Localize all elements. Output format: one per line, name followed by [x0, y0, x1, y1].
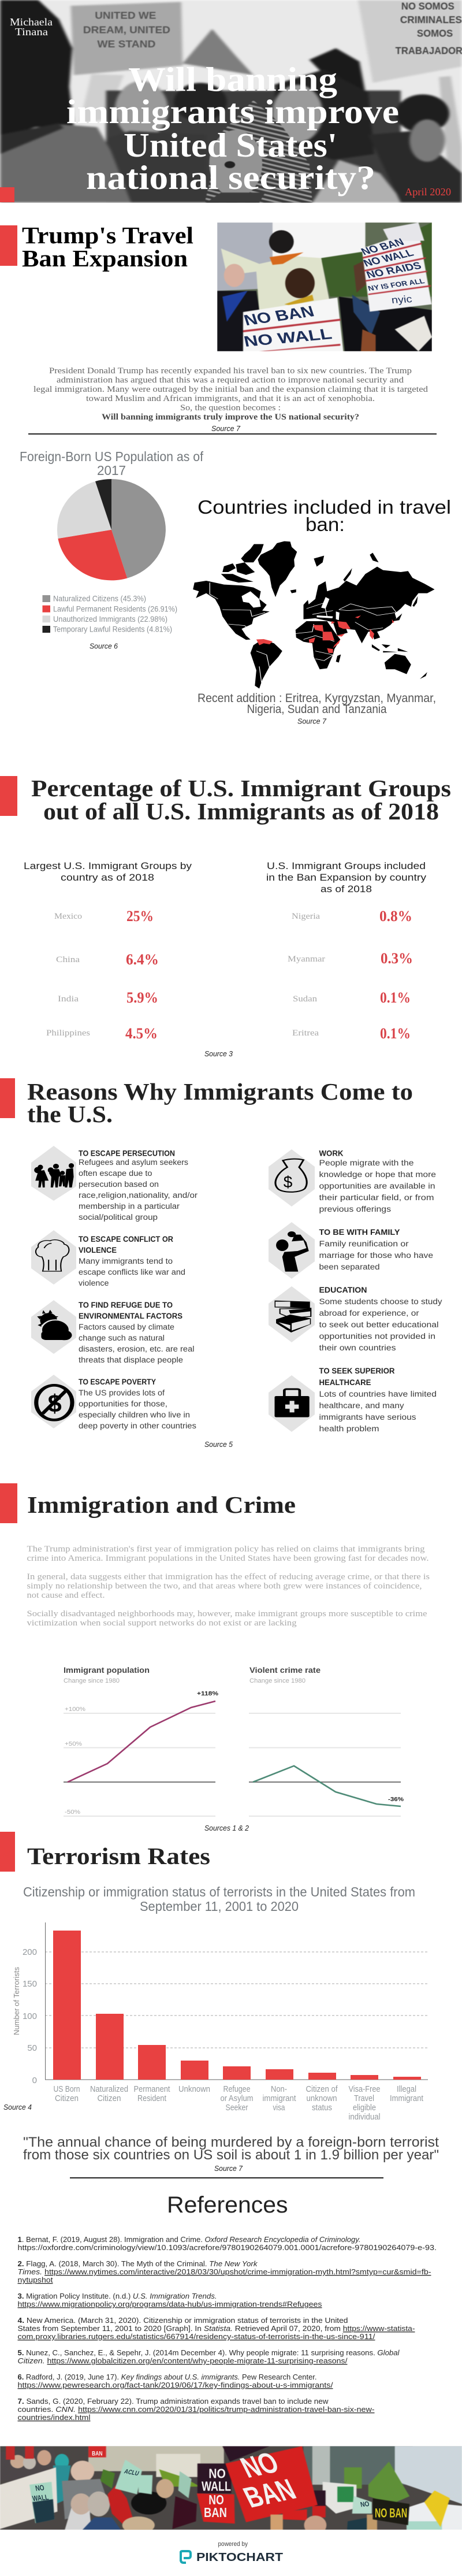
- left table: largest groups: country as of 2018: [61, 872, 154, 883]
- reason: education: abroad for experience, or: [319, 1309, 419, 1317]
- reason: work: opportunities are available in: [319, 1182, 435, 1190]
- photo: no ban no wall protest: nyic: [390, 293, 413, 306]
- line chart: immigrant population: [64, 1665, 218, 1817]
- pie legend: Temporary Lawful Residents (4.81%): [53, 625, 172, 634]
- y axis labels: 100: [23, 2011, 37, 2021]
- footer photo: no ban protest: BAN: [238, 2473, 301, 2514]
- source note: Source 6: [90, 642, 118, 651]
- section: reasons why immigrants come: [0, 1078, 442, 1449]
- left table: largest groups: [24, 860, 192, 1042]
- reason: environment: ENVIRONMENTAL FACTORS: [79, 1312, 182, 1320]
- y axis labels: 150: [23, 1979, 37, 1989]
- intro paragraph: So, the question becomes :: [180, 403, 281, 413]
- reason: persecution: persecution based on: [79, 1180, 159, 1189]
- hero photo: black and white protest crowd: DREAM, UNITED: [83, 24, 170, 35]
- reason: conflict: escape conflicts like war and: [79, 1268, 185, 1276]
- reference list: 3. Migration Policy Institute. (n.d.) U.S. Immigration Trends.: [17, 2292, 217, 2300]
- pie chart title: [20, 449, 204, 478]
- photo: no ban no wall protest: NO BAN: [242, 303, 316, 329]
- icon: crossed-out dollar: [36, 1385, 72, 1420]
- x axis category labels: Immigrant: [390, 2094, 424, 2103]
- section: references: [17, 2192, 437, 2422]
- x axis category labels: unknown: [306, 2094, 337, 2103]
- right table: ban expansion groups: 0.3%: [381, 950, 413, 967]
- section: travel ban map: [193, 496, 451, 726]
- x axis category labels: [53, 2084, 424, 2122]
- pie legend: [43, 594, 177, 634]
- left table: largest groups: Mexico: [54, 912, 82, 921]
- red heading bar: [0, 225, 17, 266]
- right table: ban expansion groups: Nigeria: [292, 912, 321, 921]
- footer photo: no ban protest: NO: [35, 2484, 45, 2493]
- crime paragraph: simply no relationship between the two, and that areas where both grew were instances of coincidence,: [27, 1582, 422, 1591]
- reference list: nytupshot: [17, 2276, 53, 2284]
- line chart: violent crime rate: Violent crime rate: [249, 1665, 321, 1675]
- map title: ban:: [305, 514, 345, 535]
- map caption: [198, 692, 436, 716]
- icon: money bag: $: [284, 1173, 292, 1191]
- intro paragraph: administration has argued that this was a required action to improve national security and: [57, 376, 404, 385]
- x axis category labels: or Asylum: [221, 2094, 253, 2103]
- powered by text: powered by: [218, 2541, 248, 2548]
- main title: United States': [124, 126, 337, 164]
- section: Trump's travel ban expansion: [0, 222, 437, 435]
- x axis category labels: Naturalized: [90, 2084, 128, 2094]
- reason: work: knowledge or hope that more: [319, 1170, 436, 1179]
- crime paragraph: [27, 1545, 430, 1628]
- line chart: immigrant population: +100%: [65, 1706, 85, 1713]
- right table: ban expansion groups: U.S. Immigrant Groups included: [267, 860, 426, 871]
- reason: work: previous offerings: [319, 1205, 391, 1213]
- right table: ban expansion groups: Eritrea: [292, 1029, 319, 1038]
- map title: [198, 496, 451, 535]
- section: terrorism rates: [0, 1832, 439, 2178]
- reason: poverty: deep poverty in other countries: [79, 1421, 196, 1430]
- x axis category labels: immigrant: [262, 2094, 296, 2103]
- left table: largest groups: China: [56, 955, 80, 964]
- pie legend: Unauthorized Immigrants (22.98%): [53, 614, 167, 623]
- crime paragraph: The Trump administration's first year of immigration policy has relied on claims that immigrants bring: [27, 1545, 425, 1554]
- x axis category labels: US Born: [53, 2084, 80, 2094]
- reason: healthcare: [269, 1367, 437, 1433]
- footer photo: no ban protest: ACLU: [123, 2468, 140, 2477]
- map caption: Nigeria, Sudan and Tanzania: [247, 703, 387, 716]
- reason: family: Family reunification or: [319, 1239, 409, 1248]
- reason: work: [269, 1149, 436, 1213]
- red heading bar: [0, 1483, 17, 1523]
- crime paragraph: crime into America. Immigrant populations in the United States have been growing fast for decades now.: [27, 1554, 429, 1563]
- icon: walking family: [34, 1163, 74, 1187]
- reason: healthcare: healthcare, and many: [319, 1401, 404, 1410]
- source note: Source 7: [297, 717, 327, 726]
- photo: no ban no wall protest: NO WALL: [362, 247, 416, 269]
- pie chart: [57, 479, 166, 580]
- icon: parent lifting child: [276, 1231, 309, 1272]
- footer photo: no ban protest: NO: [360, 2500, 370, 2508]
- left table: largest groups: 4.5%: [125, 1025, 158, 1042]
- pie chart title: 2017: [97, 463, 126, 478]
- reason: education: opportunities not provided in: [319, 1332, 435, 1341]
- x axis category labels: status: [312, 2103, 332, 2113]
- x axis category labels: individual: [349, 2112, 380, 2122]
- icon: sun behind cloud: [37, 1310, 72, 1340]
- reason: conflict: Many immigrants tend to: [79, 1257, 173, 1265]
- source note: Source 7: [214, 2164, 243, 2173]
- reason: conflict: TO ESCAPE CONFLICT OR: [79, 1235, 173, 1244]
- left table: largest groups: 5.9%: [126, 989, 158, 1006]
- reference list: 6. Radford, J. (2019, June 17). Key findings about U.S. immigrants. Pew Research Center.: [17, 2373, 316, 2381]
- footer photo: no ban protest: NO: [235, 2445, 284, 2484]
- right table: ban expansion groups: 0.1%: [380, 989, 411, 1006]
- source note: Source 5: [204, 1440, 233, 1449]
- reason: poverty: opportunities for those,: [79, 1400, 167, 1408]
- intro paragraph: [33, 366, 429, 422]
- reason: family: marriage for those who have: [319, 1251, 433, 1260]
- heading: Percentage of U.S. Immigrant Groups: [31, 775, 451, 801]
- red accent square: [0, 187, 14, 202]
- icon: medical kit: [275, 1389, 310, 1417]
- x axis category labels: Permanent: [134, 2084, 170, 2094]
- heading: [31, 775, 451, 825]
- x axis category labels: Travel: [354, 2094, 374, 2103]
- red heading bar: [0, 1832, 15, 1872]
- bar chart title: [23, 1884, 415, 1914]
- reason: persecution: membership in a particular: [79, 1202, 180, 1211]
- footer photo: no ban protest: BAN: [204, 2505, 227, 2520]
- footer photo: no ban protest: BAN: [92, 2450, 103, 2457]
- pie legend: Naturalized Citizens (45.3%): [53, 594, 146, 603]
- reason: persecution: Refugees and asylum seekers: [79, 1158, 188, 1167]
- reason: healthcare: health problem: [319, 1424, 379, 1433]
- icon: piktochart logo: [181, 2551, 191, 2563]
- left table: largest groups: Largest U.S. Immigrant Groups by: [24, 860, 192, 871]
- left table: largest groups: Philippines: [46, 1029, 90, 1038]
- left table: largest groups: 6.4%: [126, 951, 159, 968]
- reason: environment: threats that displace people: [79, 1356, 183, 1364]
- intro paragraph: toward Muslim and African immigrants, and that it is an act of xenophobia.: [86, 394, 375, 403]
- right table: ban expansion groups: [266, 860, 427, 1042]
- reference list: 1. Bernat, F. (2019, August 28). Immigration and Crime. Oxford Research Encyclopedia of Criminology.: [17, 2235, 360, 2244]
- line chart: violent crime rate: [249, 1665, 404, 1817]
- pie chart title: Foreign-Born US Population as of: [20, 449, 204, 464]
- reason: work: their particular field, or from: [319, 1193, 434, 1202]
- reason: environment: TO FIND REFUGE DUE TO: [79, 1301, 173, 1309]
- section: immigration and crime: [0, 1483, 430, 1832]
- x axis category labels: Refugee: [223, 2084, 251, 2094]
- heading: the U.S.: [27, 1101, 113, 1127]
- x axis category labels: visa: [273, 2103, 285, 2113]
- reason: conflict: VIOLENCE: [79, 1246, 117, 1254]
- footer photo: no ban protest: WALL: [202, 2479, 231, 2494]
- reference list: 5. Nunez, C., Sanchez, E., & Sepehr, J. (2014m December 4). Why people migrate: 11 surprising reasons. Global: [17, 2348, 400, 2357]
- y axis title: Number of Terrorists: [12, 1966, 21, 2035]
- reference list: https://www.pewresearch.org/fact-tank/2019/06/17/key-findings-about-u-s-immigrants/: [17, 2381, 333, 2389]
- line chart: immigrant population: +50%: [65, 1741, 82, 1747]
- hero photo: black and white protest crowd: WE STAND: [97, 38, 155, 50]
- reference list: com.proxy.libraries.rutgers.edu/statistics/667914/residency-status-of-terrorists-in-the-us-since-911/: [17, 2332, 375, 2341]
- intro paragraph: legal immigration. Many were outraged by the initial ban and the expansion claiming that it is targeted: [33, 385, 429, 394]
- line chart: immigrant population: -50%: [65, 1809, 80, 1816]
- x axis category labels: Citizen: [97, 2094, 121, 2103]
- reference list: https://oxfordre.com/criminology/view/10.1093/acrefore/9780190264079.001.0001/acrefore-9780190264079-e-93.: [17, 2243, 437, 2252]
- reason: poverty: The US provides lots of: [79, 1389, 165, 1397]
- reason: environment: disasters, erosion, etc. are real: [79, 1345, 194, 1353]
- x axis category labels: Visa-Free: [349, 2084, 380, 2094]
- piktochart wordmark: PIKTOCHART: [196, 2551, 283, 2564]
- quote: [23, 2135, 439, 2163]
- photo: no ban no wall protest: NO BAN: [359, 236, 406, 257]
- left table: largest groups: India: [58, 994, 79, 1004]
- date: April 2020: [405, 186, 451, 198]
- intro paragraph: President Donald Trump has recently expanded his travel ban to six new countries. The Trump: [49, 366, 412, 376]
- reason: environment: Factors caused by climate: [79, 1323, 174, 1331]
- x axis category labels: Seeker: [225, 2103, 248, 2113]
- reason: education: Some students choose to study: [319, 1297, 442, 1306]
- reason: environment: change such as natural: [79, 1334, 165, 1342]
- reference list: 2. Flagg, A. (2018, March 30). The Myth of the Criminal. The New York: [17, 2259, 258, 2268]
- footer photo: no ban protest: WALL: [32, 2493, 50, 2503]
- reason: education: to seek out better educational: [319, 1320, 439, 1329]
- reason: persecution: race,religion,nationality, and/or: [79, 1191, 198, 1200]
- bar chart title: Citizenship or immigration status of terrorists in the United States from: [23, 1884, 415, 1899]
- y axis labels: 50: [27, 2043, 37, 2053]
- x axis category labels: Citizen of: [306, 2084, 338, 2094]
- reference list: States from September 11, 2001 to 2020 [Graph]. In Statista. Retrieved April 07, 2020, from https://www-statista-: [17, 2324, 415, 2333]
- right table: ban expansion groups: in the Ban Expansion by country: [266, 872, 427, 883]
- main title: national security?: [86, 158, 375, 196]
- reason: healthcare: TO SEEK SUPERIOR: [319, 1367, 395, 1375]
- reason: family: been separated: [319, 1263, 380, 1271]
- reference list: https://www.migrationpolicy.org/programs/data-hub/us-immigration-trends#Refugees: [17, 2300, 322, 2308]
- reason: education: [269, 1286, 442, 1352]
- main title: immigrants improve: [66, 92, 399, 131]
- icon: crossed-out dollar: $: [48, 1390, 62, 1417]
- pie legend: Lawful Permanent Residents (26.91%): [53, 604, 177, 613]
- x axis category labels: eligible: [353, 2103, 376, 2113]
- reference list: countries. CNN. https://www.cnn.com/2020/01/31/politics/trump-administration-travel-ban-six-new-: [17, 2405, 374, 2414]
- heading: [22, 222, 193, 272]
- red heading bar: [0, 1078, 15, 1118]
- right table: ban expansion groups: Myanmar: [288, 955, 325, 964]
- author name: Michaela: [10, 16, 53, 28]
- powered by piktochart footer: [181, 2541, 283, 2564]
- reference list: Times. https://www.nytimes.com/interactive/2018/03/30/upshot/crime-immigration-myth.html?smtyp=cur&smid=fb-: [17, 2267, 431, 2276]
- map caption: Recent addition : Eritrea, Kyrgyzstan, Myanmar,: [198, 692, 436, 705]
- crime paragraph: victimization when social support networks do not exist or are lacking: [27, 1619, 297, 1628]
- reason: conflict: [31, 1230, 185, 1287]
- source note: Sources 1 & 2: [204, 1824, 249, 1832]
- photo: no ban no wall protest: NO WALL: [242, 325, 333, 350]
- source note: Source 4: [3, 2103, 32, 2111]
- references heading: References: [167, 2192, 288, 2218]
- hero photo: black and white protest crowd: [0, 0, 462, 203]
- line chart: immigrant population: Change since 1980: [64, 1677, 120, 1684]
- reason: healthcare: HEALTHCARE: [319, 1378, 371, 1387]
- x axis category labels: Non-: [271, 2084, 287, 2094]
- photo: no ban no wall protest: NO RAIDS: [364, 259, 423, 280]
- reason: persecution: social/political group: [79, 1213, 158, 1222]
- intro paragraph: Will banning immigrants truly improve the US national security?: [102, 413, 359, 422]
- crime paragraph: Socially disadvantaged neighborhoods may, however, make immigrant groups more susceptible to crime: [27, 1609, 427, 1619]
- reason: persecution: often escape due to: [79, 1169, 152, 1178]
- heading: [27, 1078, 413, 1127]
- right table: ban expansion groups: 0.1%: [380, 1025, 411, 1042]
- footer photo: no ban protest: NO: [208, 2492, 224, 2507]
- reason: family: [269, 1222, 433, 1279]
- source note: Source 7: [211, 424, 241, 433]
- author name: Tinana: [15, 26, 48, 38]
- reason: poverty: [31, 1375, 196, 1430]
- y axis labels: 0: [32, 2076, 37, 2085]
- reason: poverty: TO ESCAPE POVERTY: [79, 1378, 156, 1386]
- x axis category labels: Illegal: [397, 2084, 416, 2094]
- crime paragraph: In general, data suggests either that immigration has the effect of reducing average crime, or that there is: [27, 1572, 430, 1582]
- reason: poverty: especially children who live in: [79, 1411, 190, 1419]
- icon: stack of books: [275, 1301, 311, 1332]
- reference list: countries/index.html: [17, 2413, 91, 2422]
- reason: persecution: [31, 1146, 198, 1222]
- left table: largest groups: 25%: [126, 908, 154, 925]
- heading: out of all U.S. Immigrants as of 2018: [43, 798, 439, 825]
- y axis labels: [23, 1947, 37, 2085]
- reason: healthcare: Lots of countries have limited: [319, 1390, 437, 1398]
- line chart: immigrant population: Immigrant population: [64, 1665, 150, 1675]
- footer photo: no ban protest: [0, 2445, 462, 2535]
- heading: Terrorism Rates: [27, 1843, 210, 1869]
- photo: no ban no wall protest: NY IS FOR ALL: [367, 277, 426, 292]
- heading: Immigration and Crime: [27, 1491, 296, 1518]
- source note: Source 3: [204, 1049, 233, 1058]
- author name: [10, 16, 53, 38]
- line chart: violent crime rate: -36%: [388, 1796, 404, 1803]
- heading: Reasons Why Immigrants Come to: [27, 1078, 413, 1105]
- hero photo: black and white protest crowd: UNITED WE: [95, 9, 156, 21]
- reference list: 7. Sands, G. (2020, February 22). Trump administration expands travel ban to include new: [17, 2397, 329, 2406]
- footer photo: no ban protest: NO: [208, 2466, 226, 2481]
- reason: work: WORK: [319, 1149, 344, 1158]
- hero banner: [0, 0, 462, 203]
- reason: healthcare: immigrants have serious: [319, 1413, 416, 1421]
- reason: education: their own countries: [319, 1343, 396, 1352]
- section: percentage of immigrant groups: [0, 775, 451, 1058]
- bar chart title: September 11, 2001 to 2020: [140, 1899, 299, 1914]
- heading: Ban Expansion: [22, 245, 188, 272]
- reference list: Citizen. https://www.globalcitizen.org/en/content/why-people-migrate-11-surprising-reasons/: [17, 2356, 348, 2365]
- line chart: violent crime rate: Change since 1980: [249, 1677, 305, 1684]
- line chart: immigrant population: +118%: [197, 1691, 218, 1697]
- main title: Will banning: [128, 60, 337, 98]
- map title: Countries included in travel: [198, 496, 451, 518]
- heading: Trump's Travel: [22, 222, 193, 248]
- y axis labels: 200: [23, 1947, 37, 1957]
- reference list: 4. New America. (March 31, 2020). Citizenship or immigration status of terrorists in the United: [17, 2316, 348, 2325]
- x axis category labels: Citizen: [55, 2094, 79, 2103]
- bar chart: terrorists by status: [12, 1922, 428, 2122]
- reference list: [17, 2235, 437, 2422]
- right table: ban expansion groups: as of 2018: [321, 884, 372, 894]
- quote: from those six countries on US soil is about 1 in 1.9 billion per year": [23, 2147, 439, 2163]
- crime paragraph: not cause and effect.: [27, 1591, 105, 1600]
- reason: work: People migrate with the: [319, 1159, 413, 1167]
- footer photo: no ban protest: NO BAN: [375, 2506, 407, 2521]
- reason: conflict: violence: [79, 1279, 109, 1287]
- reason: persecution: TO ESCAPE PERSECUTION: [79, 1149, 175, 1158]
- right table: ban expansion groups: 0.8%: [379, 908, 412, 925]
- x axis category labels: Unknown: [178, 2084, 210, 2094]
- main title: [66, 60, 399, 196]
- right table: ban expansion groups: Sudan: [293, 994, 318, 1004]
- reason: family: TO BE WITH FAMILY: [319, 1228, 400, 1237]
- section: foreign-born population pie: [20, 449, 204, 651]
- quote: "The annual chance of being murdered by a foreign-born terrorist: [23, 2135, 439, 2150]
- icon: money bag: [275, 1159, 307, 1192]
- icon: explosion cloud: [36, 1240, 69, 1271]
- reason: education: EDUCATION: [319, 1286, 367, 1294]
- red heading bar: [0, 776, 17, 816]
- world map with banned countries in red: [193, 541, 435, 689]
- greenland: [258, 541, 297, 597]
- photo: no ban no wall protest: [217, 222, 432, 351]
- reason: environment: [31, 1300, 194, 1364]
- x axis category labels: Resident: [137, 2094, 167, 2103]
